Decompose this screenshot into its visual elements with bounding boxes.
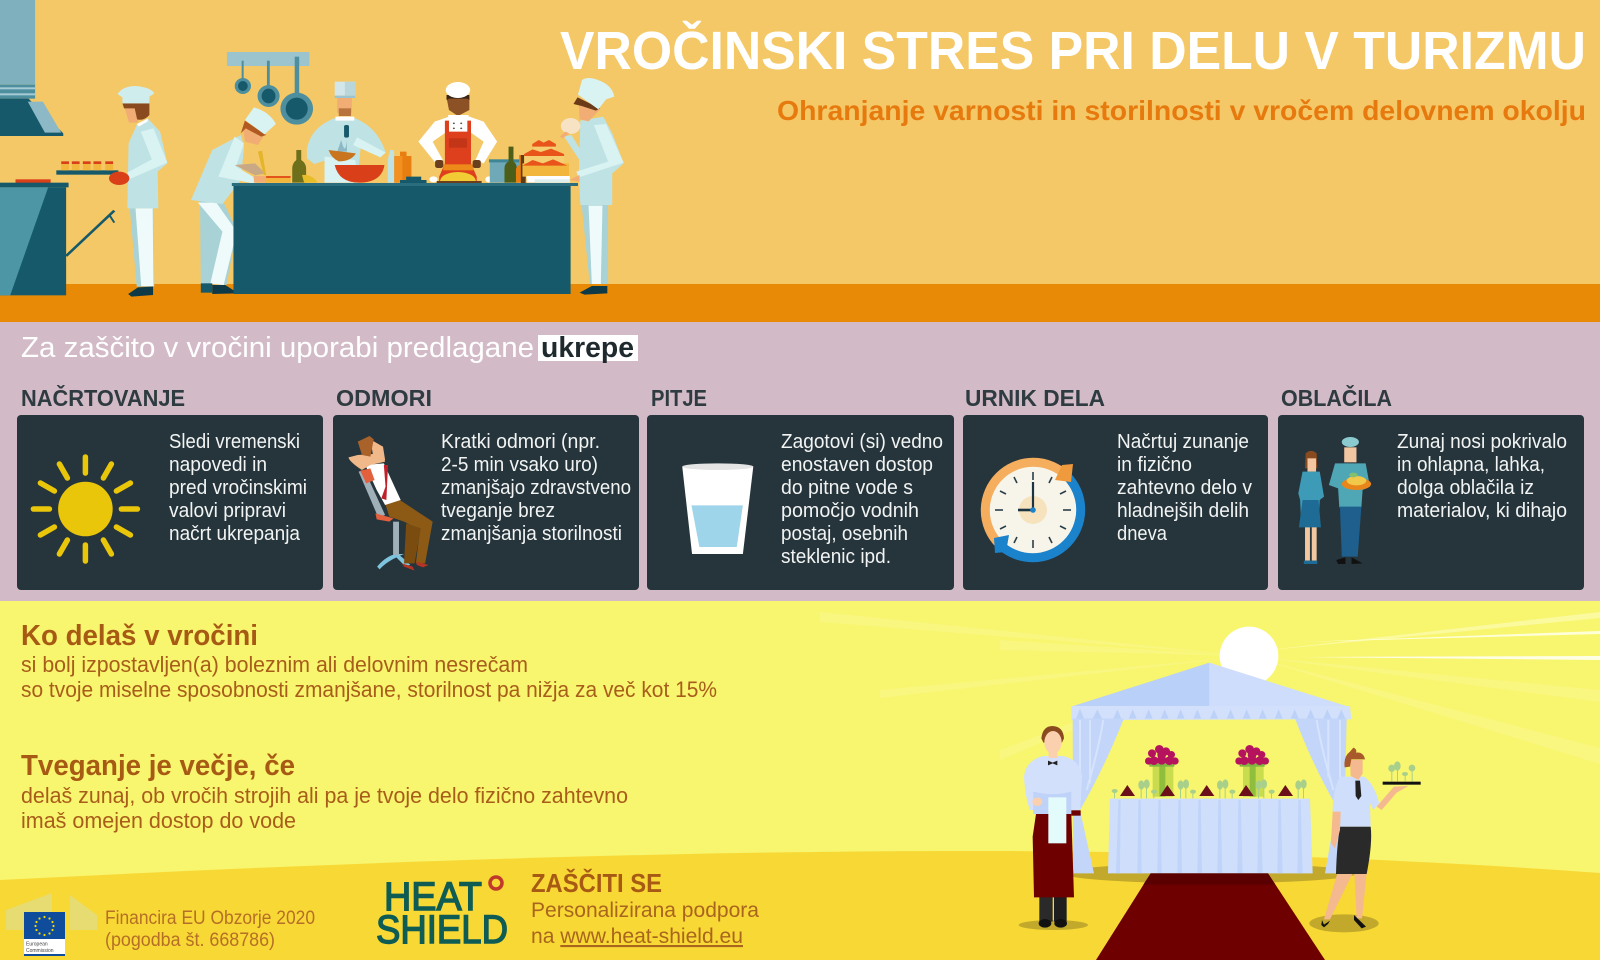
card text: enostaven dostop [781,454,933,476]
card: drinking [647,385,954,590]
card text: Zagotovi (si) vedno [781,431,943,453]
card: breaks [333,385,639,590]
kitchen illustration [0,0,624,297]
lower section background [0,601,1600,960]
card text: 2-5 min vsako uro) [441,454,598,476]
icon: clock with arrows [985,462,1081,558]
card text: do pitne vode s [781,477,913,499]
card: breaks: ODMORI [336,385,432,411]
sun rays [820,612,1600,764]
card: work schedule: URNIK DELA [965,385,1105,411]
text block: working in heat: Ko delaš v vročini [21,620,258,652]
text block: higher risk: imaš omejen dostop do vode [21,808,296,833]
logo: European Commission: Commission [26,948,54,954]
card text: materialov, ki dihajo [1397,500,1567,522]
card: planning: NAČRTOVANJE [21,384,185,411]
title: VROČINSKI STRES PRI DELU V TURIZMU [560,20,1586,81]
kitchen floor [0,284,1600,322]
text block: higher risk: Tveganje je večje, če [21,750,295,782]
logo: HEAT SHIELD [376,875,508,952]
panel heading: Za zaščito v vročini uporabi predlagane [21,332,534,364]
chef writing [191,107,291,294]
text block: working in heat: si bolj izpostavljen(a) boleznim ali delovnim nesrečam [21,652,528,677]
text block: higher risk: delaš zunaj, ob vročih strojih ali pa je tvoje delo fizično zahtevno [21,783,628,808]
layered cake [522,140,570,183]
card text: hladnejših delih [1117,500,1249,522]
card text: pred vročinskimi [169,477,307,499]
items left of the counter centre [292,150,427,183]
card text [441,431,631,545]
card: work schedule [963,385,1268,590]
card text: načrt ukrepanja [169,523,301,545]
card text: Sledi vremenski [169,431,300,453]
central counter [232,183,578,294]
tent shadow [1063,863,1357,883]
card text: Zunaj nosi pokrivalo [1397,431,1567,453]
ground [0,851,1600,960]
highlighted word: ukrepe [541,332,634,364]
card text: dneva [1117,523,1168,545]
card text: in ohlapna, lahka, [1397,454,1545,476]
event illustration [1019,627,1421,960]
funding note [105,908,315,951]
icon: resting man on chair [348,436,433,571]
banquet table [1108,799,1313,873]
waitress [1309,748,1421,932]
call to action: na www.heat-shield.eu [531,925,743,948]
panel background [0,322,1600,601]
sun [1220,627,1278,685]
card: drinking: PITJE [651,385,707,411]
card text: zahtevno delo v [1117,477,1252,499]
chef with apron [418,82,504,183]
header background [0,0,1600,284]
subtitle: Ohranjanje varnosti in storilnosti v vročem delovnem okolju [777,95,1586,126]
card text [169,431,307,545]
extractor hood [0,0,63,136]
card text [1397,431,1567,522]
icon: glass of water [682,463,753,554]
card text: Načrtuj zunanje [1117,431,1249,453]
card text [781,431,943,568]
text block: working in heat [21,620,717,702]
logo: HEAT SHIELD: HEAT [384,875,482,919]
chef with piping bag [560,78,624,295]
icon: sun [33,457,137,561]
card text: napovedi in [169,454,267,476]
text block: working in heat: so tvoje miselne sposobnosti zmanjšane, storilnost pa nižja za več kot 15% [21,677,717,702]
card: clothing: OBLAČILA [1281,384,1392,411]
card text: postaj, osebnih [781,523,908,545]
call to action: Personalizirana podpora [531,899,759,922]
tray of cupcakes [56,161,118,175]
logo: HEAT SHIELD: SHIELD [376,908,508,952]
icon: waitress and chef [1298,437,1371,564]
card text: steklenic ipd. [781,546,891,568]
card: clothing [1278,384,1584,590]
card text: dolga oblačila iz [1397,477,1534,499]
flowers and vases [1145,745,1269,797]
card text: zmanjšajo zdravstveno [441,477,631,499]
funding note: Financira EU Obzorje 2020 [105,908,315,929]
card text: valovi pripravi [169,500,286,522]
card text: tveganje brez [441,500,555,522]
text block: higher risk [21,750,628,833]
call to action [531,868,759,948]
call to action: ZAŠČITI SE [531,868,662,898]
card text: in fizično [1117,454,1192,476]
waiter [1019,726,1088,930]
funding note: (pogodba št. 668786) [105,930,275,951]
logo: European Commission [6,893,97,956]
card text [1117,431,1252,545]
tent [1071,663,1351,873]
bottles and pot [489,147,536,183]
chef with whisk [307,82,386,183]
card: planning [17,384,323,590]
card text: pomočjo vodnih [781,500,919,522]
card text: zmanjšanja storilnosti [441,523,622,545]
card text: Kratki odmori (npr. [441,431,600,453]
panel: measures [0,322,1600,601]
stove [0,179,114,295]
red carpet [1096,873,1325,960]
hanging pans [227,52,313,125]
napkins and glasses [1112,779,1307,798]
logo: European Commission: European [26,942,48,948]
chef at the stove [109,86,167,297]
